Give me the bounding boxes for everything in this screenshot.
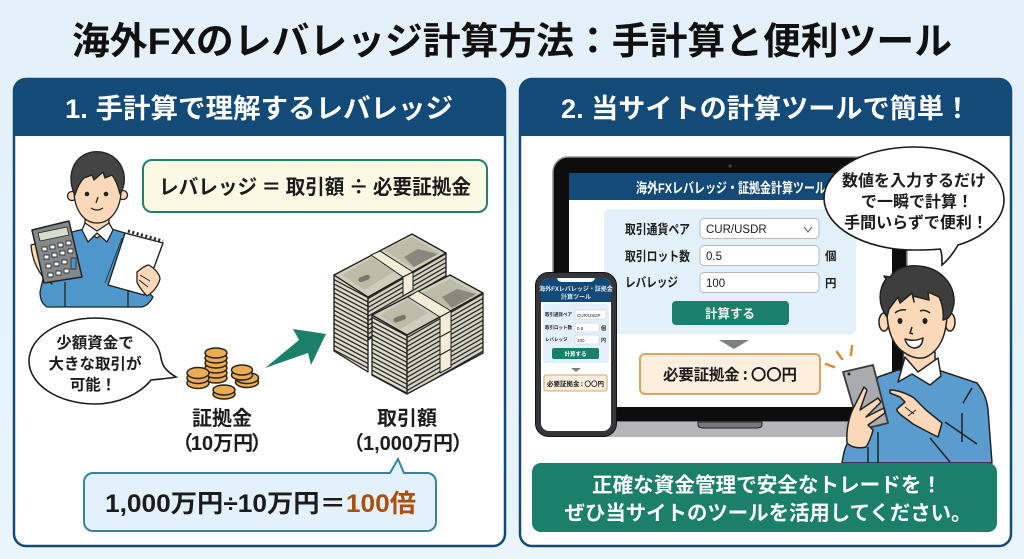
smartphone with calculator: 100 [577, 338, 585, 343]
label: trade amount [344, 407, 472, 455]
green call-to-action banner [532, 463, 997, 532]
panel: calculation tool [519, 79, 1012, 546]
green call-to-action banner: 正確な資金管理で安全なトレードを！ [592, 474, 942, 497]
calculator form [604, 209, 856, 334]
arrow [265, 329, 326, 368]
calculator form: 取引通貨ペア [625, 222, 690, 237]
smartphone with calculator: 取引通貨ペア [545, 311, 572, 318]
result box: 100x: 1,000万円÷10万円＝ 100倍 [105, 490, 416, 518]
panel 2 header bar [519, 79, 1012, 136]
speech bubble: small capital [29, 318, 176, 404]
illustration: man with smartphone [842, 266, 992, 463]
laptop screen title: 海外FXレバレッジ・証拠金計算ツール [636, 180, 826, 196]
green call-to-action banner: ぜひ当サイトのツールを活用してください。 [564, 502, 972, 525]
calculator form: 100 [706, 278, 725, 290]
formula box: レバレッジ ＝ 取引額 ÷ 必要証拠金 [159, 170, 471, 200]
smartphone with calculator: 海外FXレバレッジ・証拠金 [539, 285, 613, 293]
smartphone with calculator [536, 272, 616, 436]
laptop with calculator screen [540, 157, 907, 437]
smartphone with calculator: 取引ロット数 [545, 324, 572, 331]
smartphone with calculator: レバレッジ [545, 337, 568, 342]
label: margin [173, 407, 271, 455]
label: trade amount: 取引額 [377, 407, 437, 430]
icon: banknote stacks [334, 234, 483, 394]
panel 2 heading: 2. 当サイトの計算ツールで簡単！ [561, 94, 971, 124]
panel 1 heading: 1. 手計算で理解するレバレッジ [65, 94, 453, 124]
illustration: man with calculator and notepad [31, 152, 163, 307]
required margin result: 必要証拠金 : 〇〇円 [663, 363, 797, 385]
panel: manual calculation [13, 79, 506, 546]
speech bubble: tool benefits: 数値を入力するだけ [842, 171, 986, 190]
calculator form: レバレッジ [625, 275, 678, 290]
speech bubble: small capital: 大きな取引が [48, 354, 142, 373]
speech bubble: tool benefits [824, 147, 1004, 265]
speech bubble: small capital: 可能！ [70, 375, 116, 394]
required margin result [640, 354, 820, 394]
calculator form: 取引ロット数 [625, 249, 690, 264]
down triangle [719, 340, 749, 349]
calculator form: 円 [825, 277, 836, 290]
label: margin: 証拠金 [192, 407, 252, 430]
smartphone with calculator: 計算する [564, 350, 587, 358]
result box: 100x [84, 459, 436, 531]
smartphone with calculator: CUR/USDP [577, 313, 601, 318]
calculator form: CUR/USDR [706, 224, 767, 236]
formula box [143, 160, 487, 212]
smartphone with calculator: 必要証拠金 : 〇〇円 [547, 378, 605, 388]
label: trade amount: （1,000万円） [344, 432, 472, 455]
speech bubble: small capital: 少額資金で [56, 333, 134, 352]
speech bubble: tool benefits: で一瞬で計算！ [861, 192, 973, 211]
smartphone with calculator: 個 [601, 325, 606, 332]
smartphone with calculator: 円 [601, 338, 606, 344]
label: margin: （10万円） [173, 432, 271, 455]
smartphone with calculator: 計算ツール [561, 293, 591, 301]
calculator form: 計算する [705, 306, 755, 321]
smartphone with calculator: 0.5 [577, 326, 584, 331]
calculator form: 個 [825, 250, 836, 263]
title: 海外FXのレバレッジ計算方法：手計算と便利ツール [72, 20, 952, 62]
speech bubble: tool benefits: 手間いらずで便利！ [844, 213, 988, 232]
icon: coins [187, 348, 258, 399]
sparks near phone [826, 346, 852, 367]
calculator form: 0.5 [706, 251, 722, 263]
panel 1 header bar [13, 79, 506, 136]
